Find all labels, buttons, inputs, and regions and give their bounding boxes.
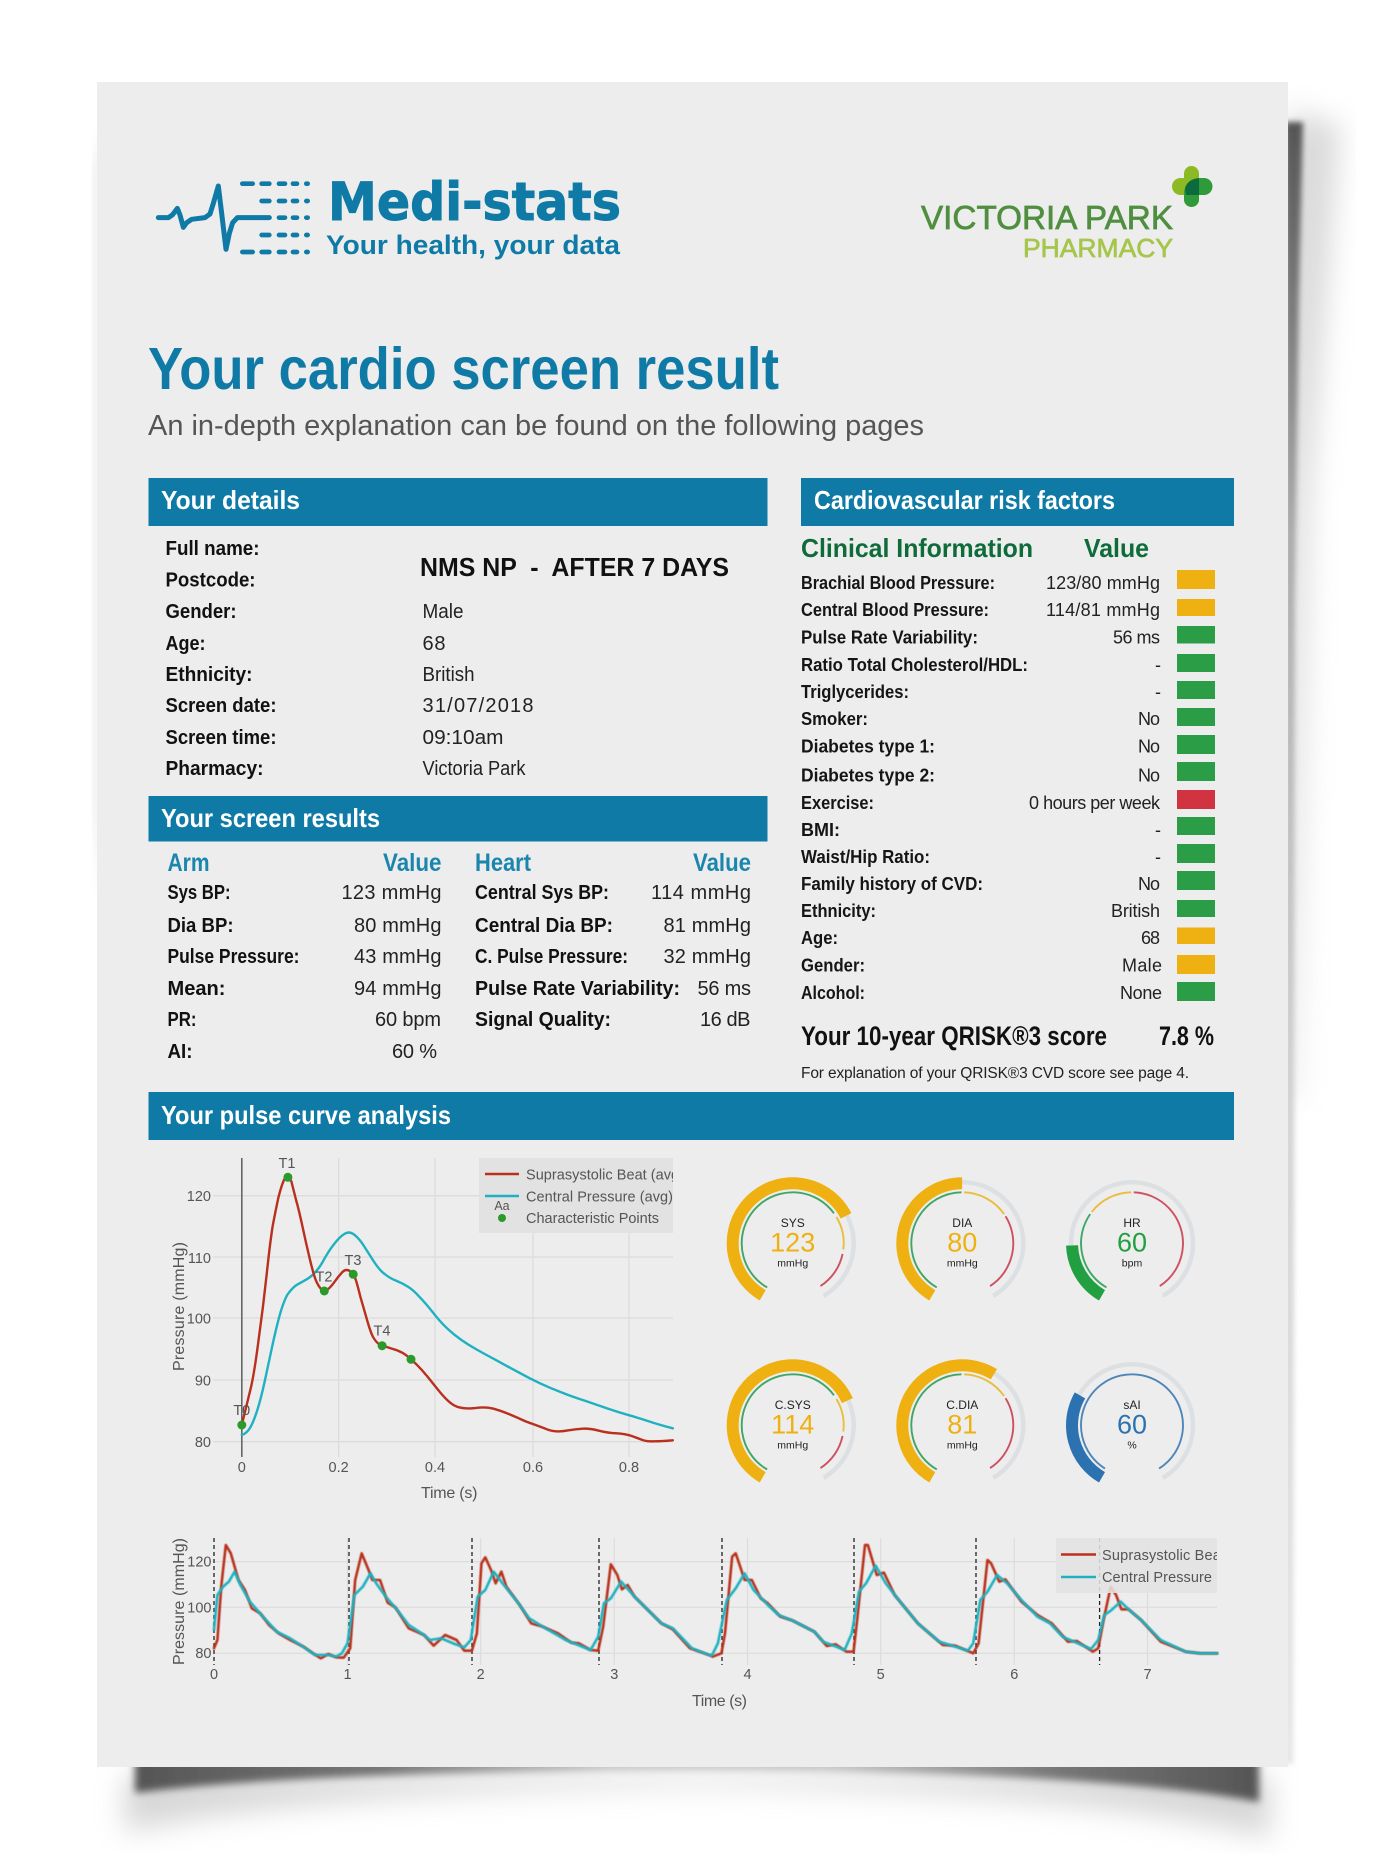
y axis title: Pressure (mmHg) — [171, 1538, 188, 1665]
heading: Cardiovascular risk factors — [814, 485, 1115, 515]
gauge: DIA: 80 — [947, 1227, 977, 1257]
heart table: 32 mmHg — [664, 946, 751, 968]
heart table: C. Pulse Pressure: — [475, 946, 628, 968]
QRISK score: Your 10-year QRISK®3 score — [801, 1021, 1107, 1051]
detail labels: Pharmacy: — [166, 758, 264, 780]
arm table: Value — [383, 849, 442, 877]
point labels: T4 — [374, 1324, 390, 1340]
risk values: No — [1138, 766, 1160, 786]
heading bar — [801, 478, 1234, 526]
x axis ticks: 6 — [1010, 1667, 1018, 1683]
detail values: 09:10am — [422, 727, 504, 749]
detail labels — [166, 538, 276, 780]
gauges — [709, 1160, 1215, 1509]
risk values — [1029, 573, 1162, 1003]
QRISK score: 7.8 % — [1159, 1021, 1214, 1051]
panel: your details — [148, 478, 768, 780]
x axis ticks: 0 — [210, 1667, 218, 1683]
risk labels: BMI: — [801, 820, 840, 840]
x axis ticks: 5 — [877, 1667, 885, 1683]
curve: suprasystolic beat — [242, 1177, 673, 1441]
arm table: PR: — [168, 1009, 196, 1031]
risk values: - — [1155, 655, 1161, 675]
arm table: 60 bpm — [375, 1009, 441, 1031]
patient name: NMS NP - AFTER 7 DAYS — [420, 552, 729, 582]
gauge: SYS — [709, 1160, 876, 1327]
detail labels: Full name: — [166, 538, 260, 560]
logo: Victoria Park Pharmacy — [921, 166, 1212, 263]
y axis ticks — [187, 1189, 211, 1451]
legend: Central Pressure — [1102, 1570, 1212, 1586]
x axis ticks: 0.4 — [425, 1460, 445, 1476]
x axis title: Time (s) — [421, 1485, 478, 1502]
x axis ticks: 0.8 — [619, 1460, 639, 1476]
risk values: 56 ms — [1113, 628, 1160, 648]
risk labels: Triglycerides: — [801, 682, 909, 702]
arm table: Dia BP: — [168, 915, 234, 937]
risk labels: Exercise: — [801, 793, 874, 813]
y axis ticks: 120 — [187, 1189, 211, 1205]
zero axis — [241, 1158, 243, 1457]
heart table: Value — [693, 849, 751, 877]
chart: pulse trace — [171, 1538, 1225, 1710]
risk labels: Diabetes type 1: — [801, 736, 935, 756]
detail values: 31/07/2018 — [422, 695, 534, 717]
gauge: C.DIA: mmHg — [947, 1439, 978, 1451]
gauge: C.SYS: mmHg — [777, 1439, 808, 1451]
gauge: C.DIA: C.DIA — [946, 1398, 978, 1412]
risk labels: Family history of CVD: — [801, 874, 983, 894]
arm table: 123 mmHg — [342, 882, 442, 904]
curve: suprasystolic beats — [214, 1545, 1217, 1658]
curve: central pressure beats — [214, 1566, 1217, 1657]
heading: Your details — [161, 485, 300, 515]
arm table: 43 mmHg — [354, 946, 442, 968]
legend: Aa — [494, 1199, 510, 1213]
risk labels: Alcohol: — [801, 983, 865, 1003]
detail labels: Screen time: — [166, 727, 276, 749]
heart table: 16 dB — [700, 1009, 750, 1031]
y axis title: Pressure (mmHg) — [171, 1242, 188, 1371]
gauge: DIA: DIA — [952, 1216, 972, 1230]
panel: cardiovascular risk factors — [801, 478, 1234, 1082]
risk status swatches — [1177, 570, 1215, 1001]
risk values: British — [1111, 901, 1160, 921]
heart table: Signal Quality: — [475, 1009, 611, 1031]
chart: average pulse curve — [171, 1156, 684, 1502]
gauge: HR — [1049, 1160, 1215, 1327]
y axis ticks: 120 — [187, 1554, 212, 1570]
risk labels: Ethnicity: — [801, 901, 876, 921]
detail values: British — [422, 664, 474, 686]
y axis ticks: 100 — [187, 1312, 211, 1328]
heading: Your screen results — [161, 803, 380, 833]
heart table: 56 ms — [698, 978, 751, 1000]
risk values: - — [1155, 820, 1161, 840]
detail labels: Screen date: — [166, 695, 276, 717]
point labels: T0 — [233, 1403, 250, 1419]
y axis ticks: 80 — [195, 1646, 212, 1662]
icon: pulse line with data dots — [158, 184, 308, 252]
column headings — [801, 533, 1149, 563]
point labels — [233, 1156, 390, 1419]
risk labels: Ratio Total Cholesterol/HDL: — [801, 655, 1028, 675]
detail labels: Postcode: — [166, 570, 256, 592]
column headings: Clinical Information — [801, 533, 1033, 563]
arm table: Pulse Pressure: — [168, 946, 300, 968]
paper sheet — [97, 82, 1288, 1767]
legend: Suprasystolic Beat — [1102, 1548, 1225, 1564]
legend — [479, 1158, 684, 1233]
x axis ticks: 2 — [477, 1667, 485, 1683]
point labels: T2 — [316, 1270, 332, 1286]
risk labels: Gender: — [801, 956, 865, 976]
gauge: C.SYS — [709, 1342, 876, 1509]
grid lines — [214, 1538, 1217, 1665]
risk labels: Central Blood Pressure: — [801, 600, 989, 620]
risk values: 114/81 mmHg — [1046, 600, 1160, 620]
heading bar — [148, 478, 768, 526]
risk values: 0 hours per week — [1029, 793, 1161, 813]
wordmark line 2: PHARMACY — [1023, 233, 1173, 263]
y axis ticks: 90 — [195, 1374, 211, 1390]
risk values: - — [1155, 847, 1161, 867]
x axis ticks — [238, 1460, 639, 1476]
QRISK note: For explanation of your QRISK®3 CVD score see page 4. — [801, 1065, 1189, 1082]
gauge: SYS: SYS — [781, 1216, 805, 1230]
legend: Central Pressure (avg) — [526, 1190, 673, 1206]
detail labels: Age: — [166, 633, 206, 655]
risk values: - — [1155, 682, 1161, 702]
arm table: 94 mmHg — [354, 978, 442, 1000]
point labels: T3 — [345, 1253, 361, 1269]
subtitle: An in-depth explanation can be found on the following pages — [148, 410, 924, 442]
gauge: C.SYS: 114 — [771, 1409, 814, 1439]
legend: Suprasystolic Beat (avg) — [526, 1168, 684, 1184]
icon: green cross — [1172, 166, 1212, 207]
risk labels: Brachial Blood Pressure: — [801, 573, 995, 593]
gauge: HR: 60 — [1117, 1227, 1147, 1257]
gauge: sAI: sAI — [1123, 1398, 1141, 1412]
x axis ticks: 0.6 — [523, 1460, 543, 1476]
panel: your pulse curve analysis — [148, 1092, 1234, 1140]
risk values: No — [1138, 709, 1160, 729]
gauge: HR: HR — [1123, 1216, 1141, 1230]
legend: Characteristic Points — [526, 1211, 659, 1227]
x axis ticks: 0.2 — [329, 1460, 349, 1476]
grid lines — [213, 1158, 673, 1457]
risk labels: Age: — [801, 928, 838, 948]
logo wordmark: Medi-stats — [328, 172, 621, 233]
risk labels: Smoker: — [801, 709, 868, 729]
arm table — [168, 849, 442, 1063]
x axis title: Time (s) — [692, 1693, 747, 1710]
arm table: AI: — [168, 1041, 192, 1063]
beat markers — [214, 1538, 1100, 1665]
heart table: Pulse Rate Variability: — [475, 978, 680, 1000]
point labels: T1 — [279, 1156, 295, 1172]
gauge: sAI: 60 — [1117, 1409, 1147, 1439]
risk values: None — [1120, 983, 1162, 1003]
detail values: Male — [422, 601, 464, 623]
y axis ticks: 80 — [195, 1435, 211, 1451]
heart table: 114 mmHg — [651, 882, 751, 904]
heading bar — [148, 796, 768, 842]
gauge: sAI — [1049, 1342, 1215, 1509]
arm table: 60 % — [392, 1041, 437, 1063]
detail values — [422, 601, 534, 780]
arm table: Arm — [168, 849, 210, 877]
gauge: C.DIA — [879, 1342, 1046, 1509]
heart table: Heart — [475, 849, 532, 877]
risk labels: Pulse Rate Variability: — [801, 628, 978, 648]
heading bar — [148, 1092, 1234, 1140]
logo tagline: Your health, your data — [326, 230, 621, 260]
gauge: SYS: 123 — [770, 1227, 815, 1257]
gauge: DIA — [879, 1160, 1046, 1327]
characteristic points — [237, 1173, 416, 1430]
detail values: Victoria Park — [422, 758, 526, 780]
detail labels: Gender: — [166, 601, 236, 623]
x axis ticks — [210, 1667, 1152, 1683]
heart table: 81 mmHg — [664, 915, 751, 937]
x axis ticks: 7 — [1143, 1667, 1152, 1683]
y axis ticks: 100 — [187, 1600, 212, 1616]
legend — [1056, 1538, 1225, 1593]
y axis ticks — [187, 1554, 212, 1662]
x axis ticks: 1 — [343, 1667, 352, 1683]
y axis ticks: 110 — [188, 1251, 211, 1267]
risk values: 123/80 mmHg — [1046, 573, 1160, 593]
x axis ticks: 3 — [610, 1667, 618, 1683]
curve: central pressure — [242, 1232, 673, 1435]
detail labels: Ethnicity: — [166, 664, 252, 686]
gauge: C.DIA: 81 — [947, 1409, 977, 1439]
x axis ticks: 0 — [238, 1460, 246, 1476]
x axis ticks: 4 — [743, 1667, 752, 1683]
gauge: HR: bpm — [1122, 1257, 1142, 1269]
gauge: C.SYS: C.SYS — [775, 1398, 811, 1412]
heart table: Central Dia BP: — [475, 915, 613, 937]
heart table: Central Sys BP: — [475, 882, 609, 904]
risk values: No — [1138, 874, 1160, 894]
risk labels: Diabetes type 2: — [801, 766, 935, 786]
heart table — [475, 849, 751, 1031]
risk labels: Waist/Hip Ratio: — [801, 847, 930, 867]
arm table: Sys BP: — [168, 882, 230, 904]
risk values: 68 — [1141, 928, 1160, 948]
risk values: No — [1138, 736, 1160, 756]
gauge: sAI: % — [1127, 1439, 1137, 1451]
gauge: SYS: mmHg — [777, 1257, 808, 1269]
arm table: 80 mmHg — [354, 915, 442, 937]
title: Your cardio screen result — [148, 336, 779, 402]
heading: Your pulse curve analysis — [161, 1100, 451, 1130]
column headings: Value — [1084, 533, 1149, 563]
detail values: 68 — [422, 633, 446, 655]
panel: your screen results — [148, 796, 768, 1063]
risk labels — [801, 573, 1028, 1003]
risk values: Male — [1122, 956, 1162, 976]
logo: Medi-stats — [158, 172, 621, 260]
arm table: Mean: — [168, 978, 226, 1000]
wordmark: VICTORIA PARK — [921, 199, 1173, 236]
gauge: DIA: mmHg — [947, 1257, 978, 1269]
